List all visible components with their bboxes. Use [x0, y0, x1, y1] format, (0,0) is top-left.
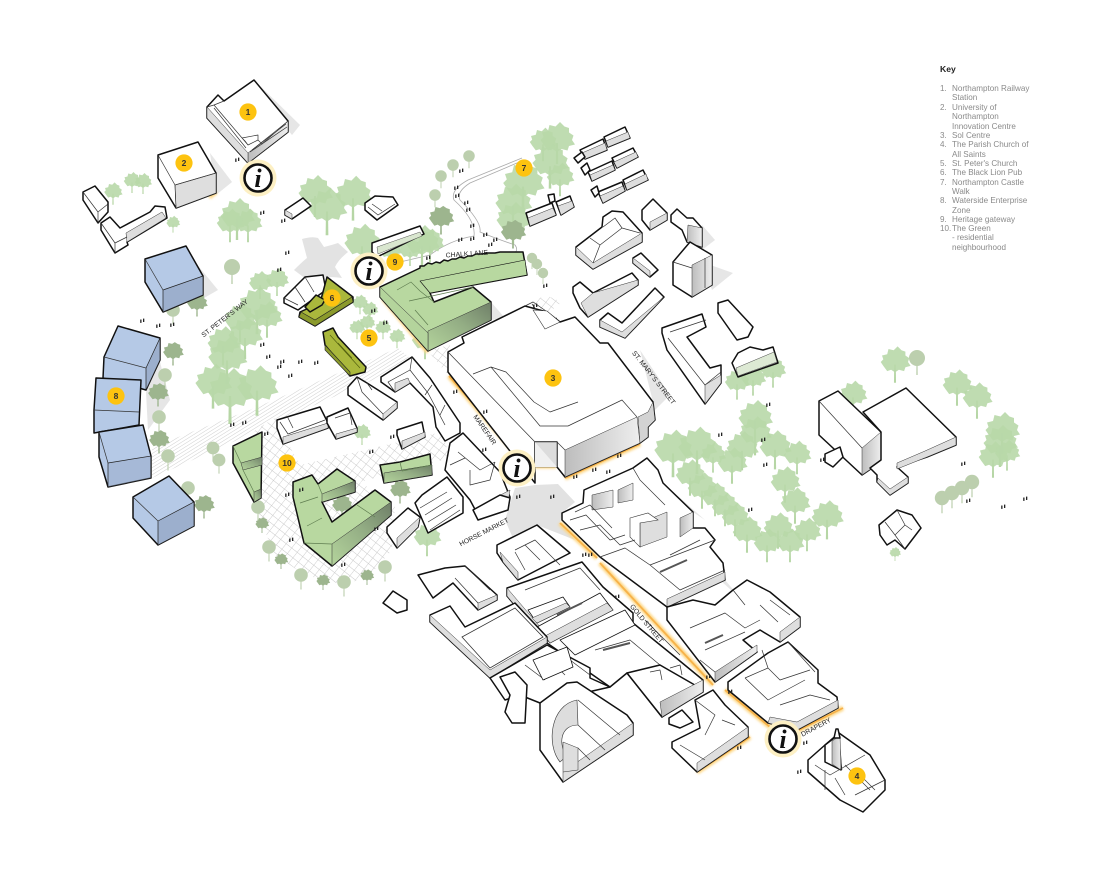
marker 9: 9	[393, 257, 398, 267]
key list: 3.	[940, 131, 947, 140]
building: curved block south	[540, 682, 633, 782]
buildings: north-east terraces	[574, 127, 648, 203]
key list: Sol Centre	[952, 131, 991, 140]
paving: cobbled square	[525, 295, 562, 317]
street labels	[201, 250, 833, 738]
marker 7: 7	[522, 163, 527, 173]
marker 1	[239, 103, 257, 121]
marker 5	[360, 329, 378, 347]
buildings: Waterside Enterprise Zone	[94, 246, 203, 545]
key list: 6.	[940, 168, 947, 177]
building: house south-east	[879, 510, 921, 549]
building 9: heritage gateway green block	[380, 252, 527, 351]
trees	[104, 122, 1020, 596]
buildings: Horse Market cluster	[383, 433, 510, 613]
path: castle walk	[400, 158, 524, 262]
key list: Innovation Centre	[952, 122, 1016, 131]
marker 1: 1	[246, 107, 251, 117]
key list: The Black Lion Pub	[952, 168, 1023, 177]
key list: St. Peter's Church	[952, 159, 1017, 168]
label: Horse Market: HORSE MARKET	[458, 517, 510, 548]
key list: 7.	[940, 178, 947, 187]
marker 5: 5	[367, 333, 372, 343]
marker 6: 6	[330, 293, 335, 303]
marker 7	[515, 159, 533, 177]
key list: neighbourhood	[952, 243, 1006, 252]
key list: 2.	[940, 103, 947, 112]
plaza: St Peter's Way star	[294, 237, 348, 282]
paving: central cobbles	[428, 345, 460, 376]
trees: north centre	[298, 150, 475, 269]
buildings: Gold Street south	[669, 690, 748, 772]
buildings: Gold Street north blocks	[562, 458, 838, 730]
key list: Heritage gateway	[952, 215, 1016, 224]
info icon: heritage gateway	[350, 252, 388, 290]
paving: The Green cobbles	[255, 418, 450, 585]
numbered markers	[107, 103, 866, 785]
blue block D	[133, 476, 194, 545]
key list: Walk	[952, 187, 971, 196]
trees: castle walk	[495, 122, 575, 284]
info icon: Marefair	[498, 450, 536, 486]
marker 10	[278, 454, 296, 472]
key	[940, 64, 1030, 252]
key heading: Key	[940, 64, 956, 74]
key list	[940, 84, 1030, 252]
marker 2: 2	[182, 158, 187, 168]
label: Gold Street: GOLD STREET	[628, 603, 664, 645]
key list: Northampton	[952, 112, 999, 121]
buildings: castle walk houses	[526, 194, 574, 226]
info icon: heritage gateway: i	[365, 257, 373, 286]
trees: St Peter's Way	[195, 268, 289, 424]
marker 4: 4	[855, 771, 860, 781]
trees: The Green ring	[251, 424, 441, 596]
buildings: north-west houses	[83, 186, 424, 257]
label: St Mary's Street: ST. MARY'S STREET	[630, 350, 676, 406]
key list: The Green	[952, 224, 991, 233]
info icon: Marefair: i	[513, 454, 521, 483]
buildings: Black Lion Pub	[284, 275, 353, 326]
trees: park	[654, 400, 844, 562]
key list: 4.	[940, 140, 947, 149]
shadows	[146, 80, 900, 600]
key list: 9.	[940, 215, 947, 224]
key list: 10.	[940, 224, 951, 233]
trees: St Peter's Church row	[349, 295, 439, 359]
marker 10: 10	[282, 458, 292, 468]
building: green wedge block	[233, 432, 262, 502]
key list: Station	[952, 93, 977, 102]
building 1: railway station	[207, 80, 288, 163]
label: Marefair: MAREFAIR	[471, 414, 497, 446]
info icon: station	[240, 160, 276, 196]
building: The Green residential block	[293, 469, 391, 566]
info icon: Drapery	[764, 720, 802, 758]
buildings: east tall block and wing	[819, 388, 956, 495]
info icons	[240, 160, 802, 758]
blue block A	[103, 326, 160, 390]
marker 3: 3	[551, 373, 556, 383]
info icon: Drapery: i	[779, 725, 787, 754]
buildings: St Peter's Church	[323, 328, 366, 376]
label: Chalk Lane: CHALK LANE	[446, 250, 489, 259]
key list: University of	[952, 103, 997, 112]
key list: Waterside Enterprise	[952, 196, 1028, 205]
marker 2	[175, 154, 193, 172]
marker 9	[386, 253, 404, 271]
key list: 1.	[940, 84, 947, 93]
trees: Waterside	[148, 293, 225, 518]
blue block C	[99, 425, 151, 487]
blue block north	[145, 246, 203, 312]
label: St Peter's Way: ST. PETER'S WAY	[201, 298, 250, 339]
trees: top left	[104, 172, 262, 284]
building 3: Sol Centre	[448, 302, 655, 483]
marker 3	[544, 369, 562, 387]
key list: Zone	[952, 206, 971, 215]
blue block B	[94, 378, 141, 433]
key list: Northampton Railway	[952, 84, 1030, 93]
street highlights	[209, 192, 843, 772]
buildings: central housing north of The Green	[277, 357, 460, 449]
building 4: Parish Church of All Saints	[808, 729, 885, 812]
key list: All Saints	[952, 150, 986, 159]
trees: east	[725, 346, 1020, 561]
label: Drapery: DRAPERY	[800, 717, 833, 738]
key list: 5.	[940, 159, 947, 168]
marker 8: 8	[114, 391, 119, 401]
key list: - residential	[952, 233, 994, 242]
marker 4	[848, 767, 866, 785]
key list: 8.	[940, 196, 947, 205]
key list: The Parish Church of	[952, 140, 1029, 149]
paving: hatched walkway	[152, 348, 415, 478]
info icon: station: i	[254, 164, 262, 193]
building 2: innovation centre	[158, 142, 216, 208]
buildings: west of Gold Street	[418, 525, 703, 723]
building: green small block	[380, 454, 432, 483]
key list: Northampton Castle	[952, 178, 1024, 187]
ground: plazas and paving	[152, 158, 575, 585]
buildings: St Mary's Street east	[573, 199, 778, 404]
pedestrian markers	[140, 158, 1027, 774]
plaza: Horse Market	[505, 484, 575, 540]
marker 6	[323, 289, 341, 307]
marker 8	[107, 387, 125, 405]
